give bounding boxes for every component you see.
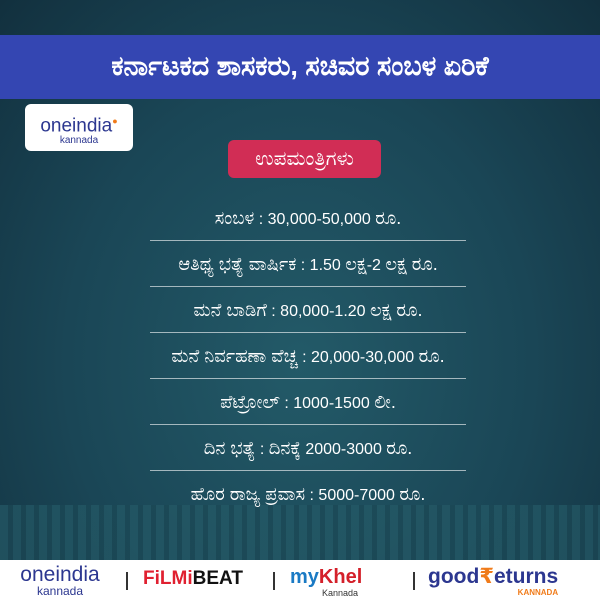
logo oneindia: oneindia	[20, 563, 100, 586]
row 4: ಮನೆ ನಿರ್ವಹಣಾ ವೆಚ್ಚ : 20,000-30,000 ರೂ.	[171, 346, 445, 366]
footer logos	[0, 560, 600, 604]
logo oneindia	[20, 563, 100, 598]
logo mykhel	[290, 566, 362, 598]
building silhouette	[0, 505, 600, 560]
logo goodreturns: good₹eturns	[428, 565, 558, 588]
pill heading: ಉಪಮಂತ್ರಿಗಳು	[255, 148, 354, 170]
title banner	[0, 35, 600, 99]
title banner: ಕರ್ನಾಟಕದ ಶಾಸಕರು, ಸಚಿವರ ಸಂಬಳ ಏರಿಕೆ	[111, 51, 489, 81]
logo mykhel: Kannada	[322, 588, 358, 598]
row 1: ಸಂಬಳ : 30,000-50,000 ರೂ.	[215, 208, 401, 228]
logo goodreturns: KANNADA	[518, 588, 558, 597]
logo mykhel: myKhel	[290, 566, 362, 588]
row 2: ಆತಿಥ್ಯ ಭತ್ಯೆ ವಾರ್ಷಿಕ : 1.50 ಲಕ್ಷ-2 ಲಕ್ಷ ರೂ.	[178, 254, 438, 274]
pill heading	[228, 140, 381, 178]
logo: oneindia kannada	[25, 104, 133, 151]
list rows	[150, 208, 466, 507]
logo oneindia: kannada	[37, 584, 83, 598]
row 6: ದಿನ ಭತ್ಯೆ : ದಿನಕ್ಕೆ 2000-3000 ರೂ.	[204, 438, 412, 458]
row 5: ಪೆಟ್ರೋಲ್ : 1000-1500 ಲೀ.	[220, 392, 396, 412]
logo: oneindia kannada: oneindia●	[40, 115, 118, 136]
row 3: ಮನೆ ಬಾಡಿಗೆ : 80,000-1.20 ಲಕ್ಷ ರೂ.	[194, 300, 422, 320]
logo: oneindia kannada: kannada	[60, 135, 98, 146]
logo filmibeat: FiLMiBEAT	[143, 568, 243, 589]
row 7: ಹೊರ ರಾಜ್ಯ ಪ್ರವಾಸ : 5000-7000 ರೂ.	[191, 484, 425, 504]
